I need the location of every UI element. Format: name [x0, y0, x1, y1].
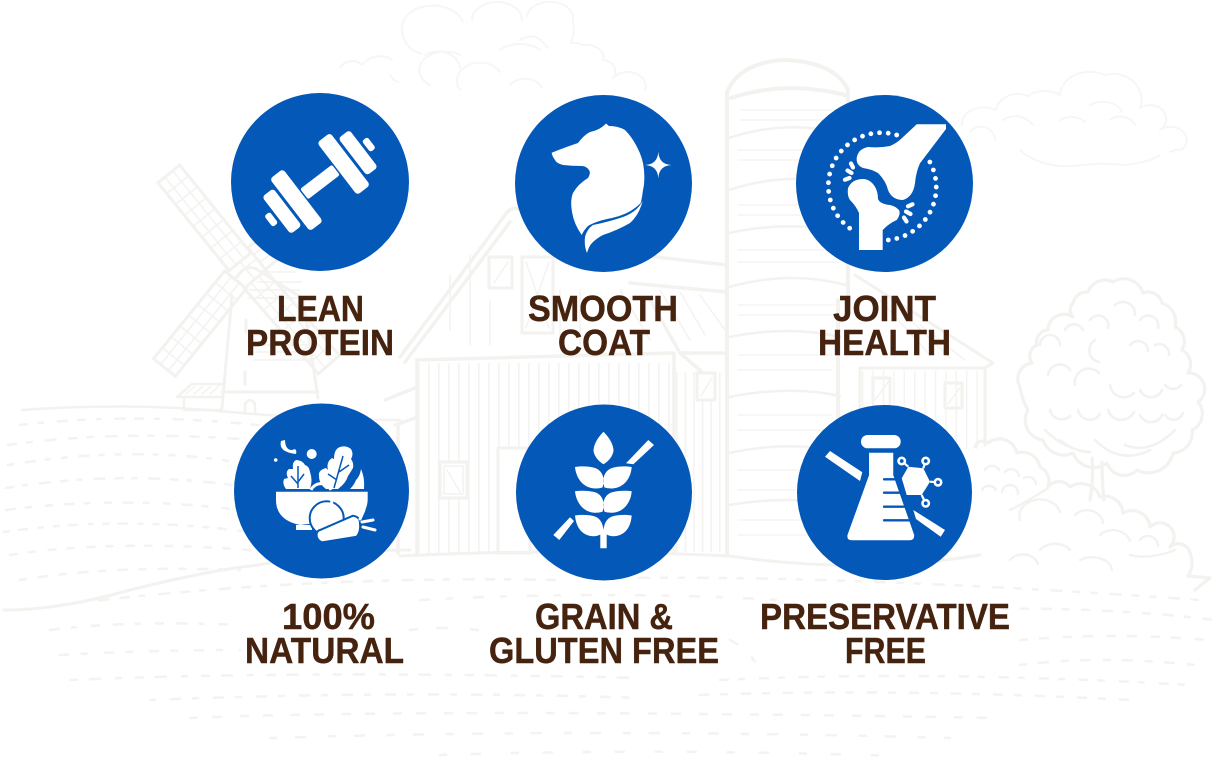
icon: joint bones: [796, 95, 973, 272]
left field: [4, 406, 410, 610]
panel: grain and gluten free: [489, 404, 719, 671]
bowl: [276, 492, 368, 530]
label: smooth coat: [528, 288, 678, 363]
windmill blades: [154, 165, 353, 376]
label: joint health: [818, 288, 951, 363]
icon: crossed-out wheat: [516, 404, 692, 580]
label: grain and gluten free: [489, 596, 719, 671]
right barn: [855, 275, 993, 445]
label: joint health: JOINT: [833, 288, 936, 329]
label: 100% natural: NATURAL: [245, 630, 404, 671]
label: smooth coat: SMOOTH: [528, 288, 678, 329]
label: smooth coat: COAT: [558, 322, 650, 363]
windmill: [154, 165, 353, 414]
barn: [385, 208, 727, 553]
garnish: [281, 440, 296, 454]
label: preservative free: FREE: [845, 630, 926, 671]
label: lean protein: [246, 288, 394, 363]
molecule: [898, 458, 941, 506]
label: lean protein: PROTEIN: [246, 322, 394, 363]
icon: salad bowl with vegetables: [234, 404, 409, 578]
panel: smooth coat: [515, 95, 692, 363]
silo: [727, 60, 848, 555]
barn wall: [385, 355, 727, 553]
label: 100% natural: 100%: [282, 596, 375, 637]
leaves: [283, 460, 312, 489]
top cloud: [340, 2, 646, 90]
carrot: [317, 516, 360, 542]
panel: 100% natural: [234, 404, 409, 671]
label: preservative free: PRESERVATIVE: [760, 596, 1010, 637]
panel: lean protein: [231, 93, 409, 363]
label: grain and gluten free: GLUTEN FREE: [489, 630, 719, 671]
icon: crossed-out flask and molecule: [797, 405, 972, 580]
icon: dog with sparkle: [515, 95, 692, 272]
flask: [847, 452, 915, 541]
foreground fields: [50, 552, 1215, 756]
label: 100% natural: [245, 596, 404, 671]
barn windows: [440, 257, 715, 553]
label: joint health: HEALTH: [818, 322, 951, 363]
right bushes: [975, 439, 1210, 590]
label: preservative free: [760, 596, 1010, 671]
label: grain and gluten free: GRAIN &: [535, 596, 673, 637]
tree trunk: [1090, 458, 1104, 500]
windmill tower: [222, 268, 318, 408]
tree: [1018, 279, 1205, 500]
apple: [310, 501, 344, 535]
barn roof: [400, 208, 727, 372]
panel: joint health: [796, 95, 973, 363]
panel: preservative free: [760, 405, 1010, 671]
label: lean protein: LEAN: [277, 288, 364, 329]
right cloud: [962, 72, 1187, 166]
icon: dumbbell: [231, 93, 409, 271]
windmill shed: [177, 384, 255, 414]
